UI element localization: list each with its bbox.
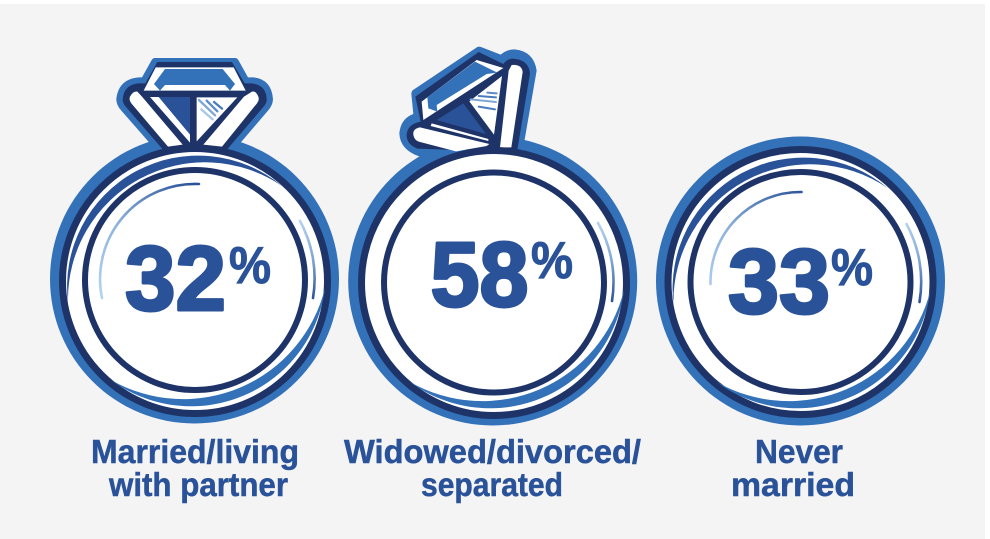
inner circle xyxy=(85,170,305,390)
swooshes and highlights xyxy=(673,158,930,408)
label: never married xyxy=(731,433,855,503)
inner circle xyxy=(384,172,604,392)
swoosh and highlight xyxy=(410,223,624,408)
label: never married: Never xyxy=(755,433,843,470)
ring: widowed/divorced/separated xyxy=(344,47,641,503)
label: widowed/divorced/separated xyxy=(344,433,641,503)
label: never married: married xyxy=(731,466,855,503)
icon: tilted diamond xyxy=(399,47,537,157)
ring dark band and white face xyxy=(362,150,626,416)
ring: married/living with partner xyxy=(50,58,339,503)
ring dark band and white face xyxy=(62,148,328,414)
value: 58 percent: 58 xyxy=(430,224,528,326)
label: married/living with partner xyxy=(91,433,299,503)
ring outer band xyxy=(348,136,637,426)
label: married/living with partner: Married/living xyxy=(91,433,299,470)
inner circle xyxy=(690,172,910,392)
ring dark band and white face xyxy=(668,150,933,414)
label: married/living with partner: with partner xyxy=(108,466,288,503)
value: 58 percent: % xyxy=(531,232,573,290)
value: 32 percent: 32 xyxy=(125,228,226,330)
ring outer band xyxy=(50,134,339,424)
value: 33 percent: 33 xyxy=(728,231,830,333)
swooshes and highlights xyxy=(67,156,325,406)
label: widowed/divorced/separated: Widowed/divorced/ xyxy=(344,433,641,470)
value: 33 percent: % xyxy=(831,239,873,297)
ring outer band xyxy=(656,136,945,426)
label: widowed/divorced/separated: separated xyxy=(421,466,563,503)
value: 32 percent: % xyxy=(229,237,271,295)
ring: never married xyxy=(656,136,945,503)
icon: upright diamond xyxy=(116,58,273,150)
